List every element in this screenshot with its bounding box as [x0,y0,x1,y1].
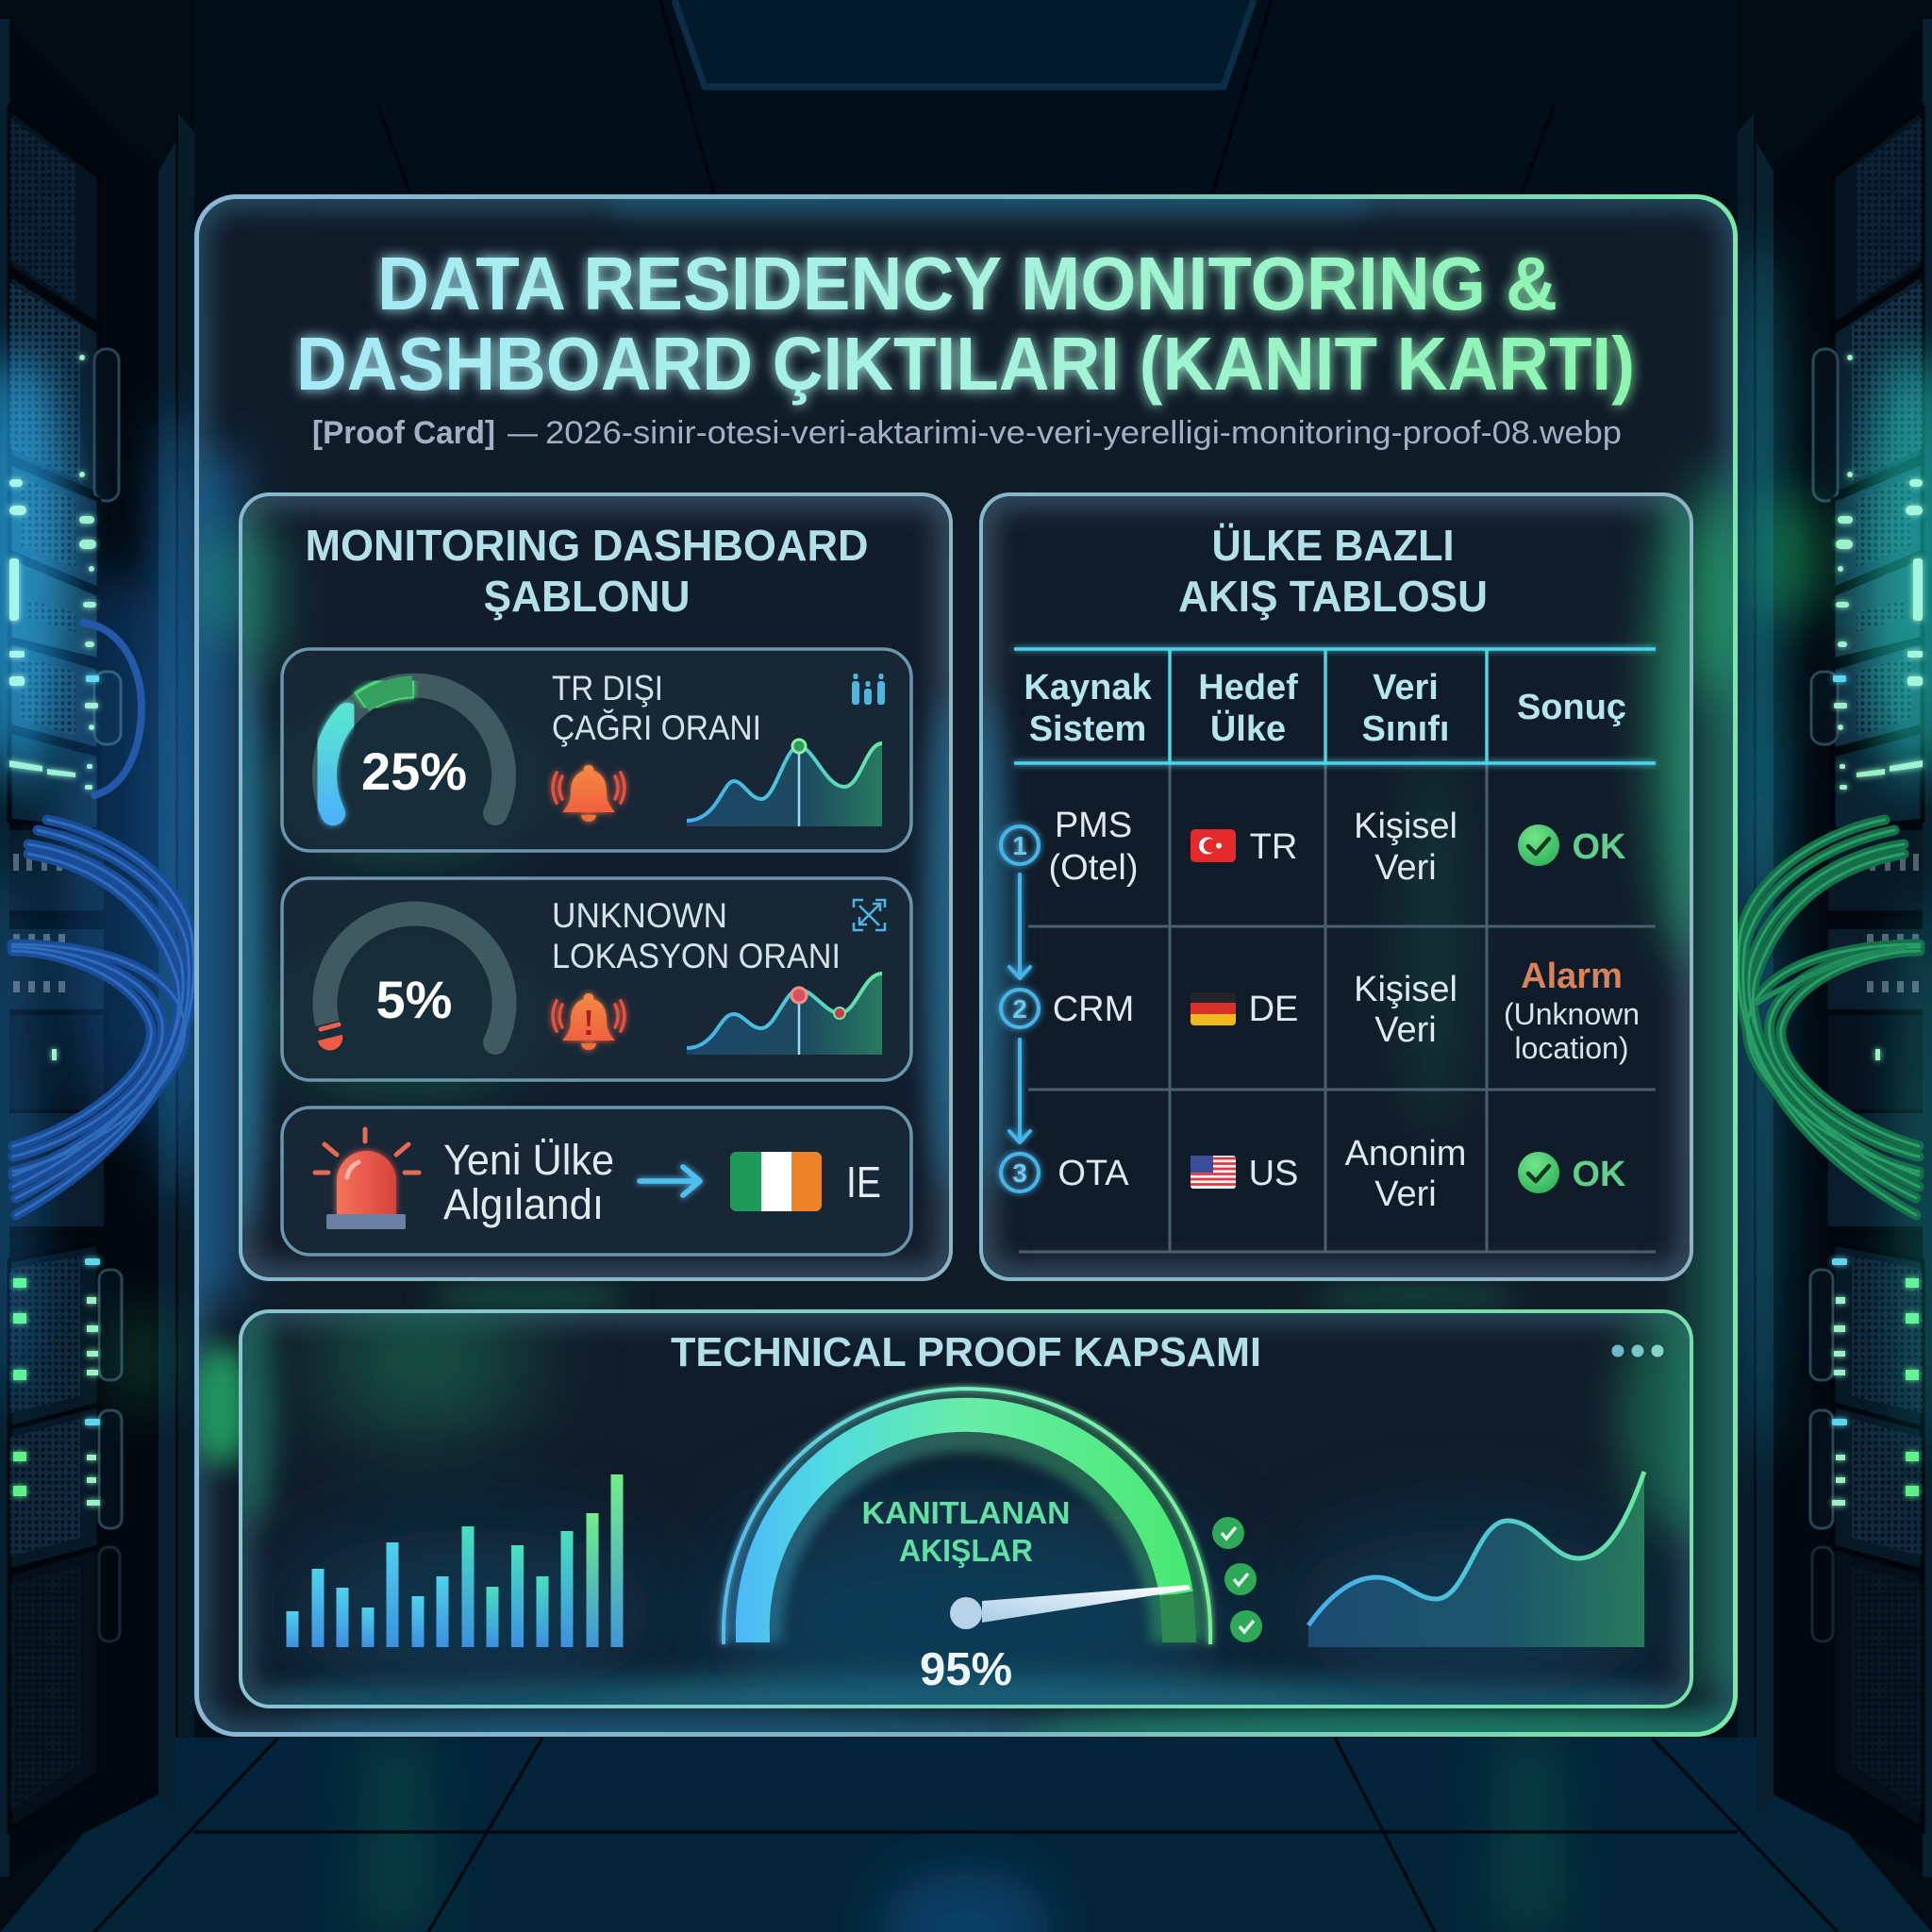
row 1: Kişisel [1354,807,1457,846]
server rack left [0,0,194,1932]
flag: IE [730,1152,822,1211]
title [296,242,1635,406]
panel heading: TECHNICAL PROOF KAPSAMI [671,1329,1261,1375]
flow steps and arrows [1001,826,1039,1191]
label: ÇAĞRI ORANI [552,708,761,747]
main glass card [187,194,1811,1756]
flow steps and arrows: 3 [1012,1158,1027,1188]
cables: green bundle right [1738,820,1920,1215]
cables: blue bundle left [12,623,194,1215]
flow steps and arrows: 2 [1012,994,1027,1024]
panel: monitoring dashboard [215,492,973,1281]
gauge: 25%: 25% [361,741,467,801]
gauge label: KANITLANAN [862,1496,1070,1531]
row 3: OK [1572,1155,1626,1194]
subtitle: — [508,415,538,451]
arrow [640,1167,700,1195]
row 2: DE [1249,990,1298,1029]
icon: dots [1611,1345,1664,1357]
gauge label: AKIŞLAR [899,1534,1033,1569]
card: TR dışı çağrı oranı [282,649,911,851]
table header [1024,668,1626,749]
gauge: 5%: 5% [376,970,452,1029]
row 3: Veri [1374,1174,1437,1214]
row 3: OTA [1058,1154,1129,1193]
status: alarm [1504,957,1640,1065]
panel: technical proof kapsamı [239,1309,1693,1708]
label: LOKASYON ORANI [552,937,841,975]
status: alarm: Alarm [1521,957,1623,996]
icon: alert bell [553,993,625,1050]
panel heading: ŞABLONU [483,572,691,621]
server rack right [1738,0,1932,1932]
table header: Hedef [1198,668,1298,708]
label: IE: IE [846,1158,881,1207]
label: TR DIŞI [552,669,663,708]
status: ok [1518,1152,1559,1193]
icon: expand [854,900,885,930]
label [443,1136,614,1228]
row 2: Kişisel [1354,970,1457,1009]
title: DATA RESIDENCY MONITORING & [377,242,1557,325]
row 1 [1049,806,1626,888]
status: ok [1518,824,1559,866]
label: Algılandı [443,1180,604,1228]
flag: TR [1191,829,1236,862]
subtitle: [Proof Card] [312,415,495,451]
card: unknown lokasyon oranı [282,878,911,1080]
row 1: (Otel) [1049,848,1138,888]
panel: ülke bazlı akış tablosu [961,472,1726,1281]
gauge label [862,1496,1070,1569]
gauge: 5% [318,914,505,1053]
row 2: Veri [1374,1010,1437,1050]
table header: Ülke [1210,708,1286,749]
ambient glows [0,236,1932,1462]
label: Yeni Ülke [443,1136,614,1184]
subtitle: 2026-sinir-otesi-veri-aktarimi-ve-veri-yerelligi-monitoring-proof-08.webp [545,415,1622,451]
panel heading: ÜLKE BAZLI [1211,521,1455,570]
table header: Sınıfı [1362,709,1449,749]
panel heading [306,521,868,621]
row 1: TR [1250,827,1297,867]
panel heading: AKIŞ TABLOSU [1178,572,1488,621]
label [552,669,761,747]
icon: bars [852,674,885,705]
check marks [1212,1517,1262,1642]
area chart [1308,1472,1644,1647]
gauge: kanıtlanan akışlar [724,1389,1210,1695]
title: DASHBOARD ÇIKTILARI (KANIT KARTI) [296,322,1635,406]
table header: Sonuç [1517,688,1626,727]
row 1: OK [1572,827,1626,867]
icon: bell [553,765,625,822]
table header: Kaynak [1024,668,1152,708]
label [552,896,841,975]
label: UNKNOWN [552,896,727,935]
table grid [1014,649,1656,1252]
table header: Veri [1373,668,1439,708]
status: alarm: location) [1515,1031,1628,1065]
card: yeni ülke algılandı [282,1108,911,1255]
status: alarm: (Unknown [1504,997,1640,1031]
icon: siren [315,1129,419,1229]
row 2: CRM [1053,990,1134,1029]
panel heading [1178,521,1488,621]
bar chart [287,1474,623,1647]
row 1: Veri [1374,848,1437,888]
flag: DE [1191,992,1236,1025]
row 1: PMS [1055,806,1132,845]
row 3: Anonim [1345,1134,1466,1174]
row 2 [1053,957,1640,1065]
line chart [687,740,882,826]
row 3 [1058,1134,1626,1214]
flow steps and arrows: 1 [1012,831,1027,860]
flag: US [1191,1156,1236,1189]
panel heading: MONITORING DASHBOARD [306,521,868,570]
needle [950,1585,1191,1629]
line chart [687,974,882,1055]
gauge: 25% [325,686,504,813]
table header: Sistem [1029,709,1146,749]
value: 95% [920,1644,1012,1695]
row 3: US [1249,1154,1298,1193]
